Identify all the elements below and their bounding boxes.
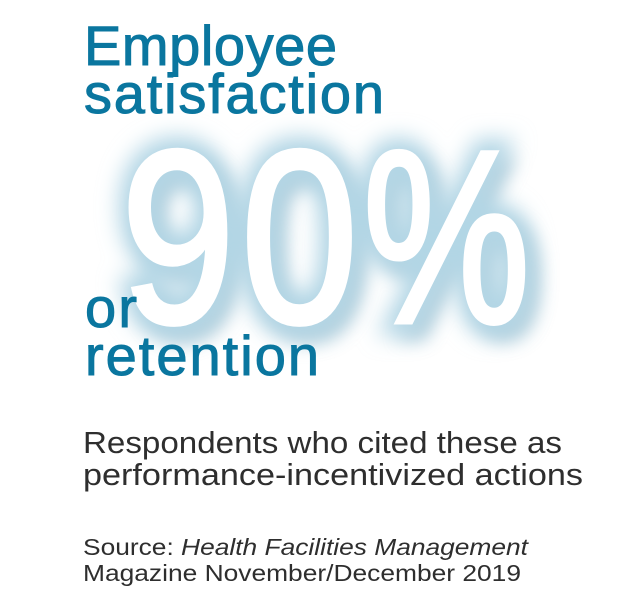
heading: or retention [85, 276, 319, 387]
heading: employee satisfaction: satisfaction [84, 62, 384, 125]
heading: employee satisfaction: Employee [84, 14, 337, 77]
text block: source [83, 534, 530, 586]
big number: 90% with glow: % [363, 100, 530, 375]
text block: respondents description: performance-incentivized actions [83, 457, 583, 492]
big number: 90% with glow: 9 [121, 100, 235, 375]
text block: source: Magazine November/December 2019 [83, 560, 521, 586]
big number: 90% with glow [121, 100, 541, 386]
big number: 90% with glow: 0 [241, 100, 358, 375]
text block: respondents description [83, 425, 583, 492]
big number: 90% with glow: 0 [241, 100, 358, 375]
text block: respondents description: Respondents who cited these as [83, 425, 562, 460]
big number: 90% with glow: % [374, 111, 541, 386]
text block: source: Source: Health Facilities Management [83, 534, 530, 560]
big number: 90% with glow: 0 [252, 111, 369, 386]
heading: or retention: retention [85, 324, 319, 387]
heading: employee satisfaction [84, 14, 384, 125]
big number: 90% with glow: % [363, 100, 530, 375]
big number: 90% with glow: 9 [121, 100, 235, 375]
big number: 90% with glow: 9 [132, 111, 246, 386]
heading: or retention: or [85, 276, 137, 339]
